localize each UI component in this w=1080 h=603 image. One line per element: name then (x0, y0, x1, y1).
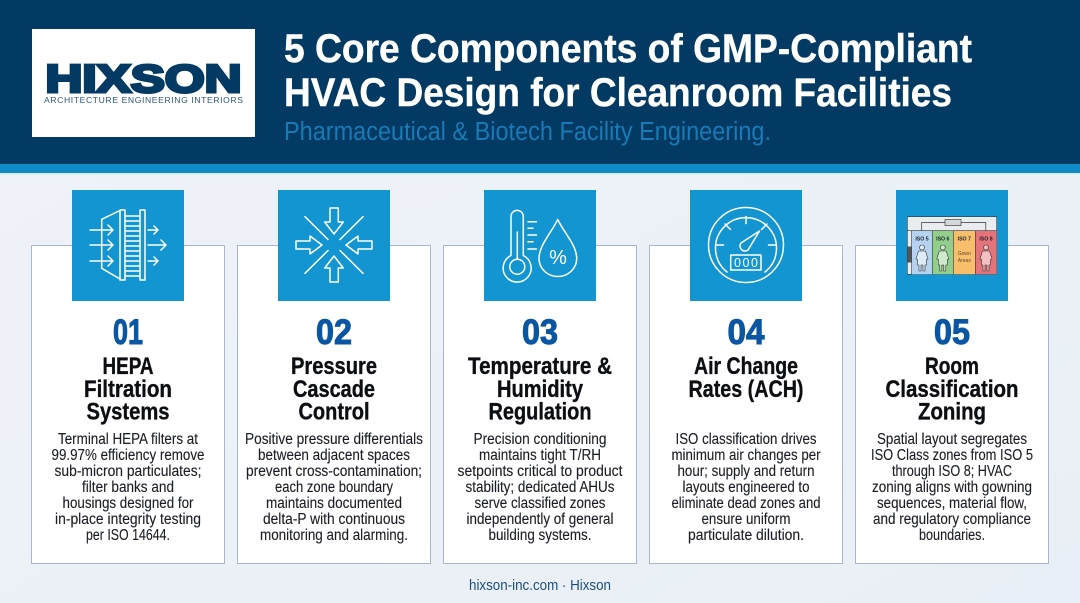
heading: Temperature & Humidity Regulation: Temperature & (468, 353, 612, 380)
heading: Pressure Cascade Control: Control (298, 398, 370, 426)
icon: HEPA filter (90, 210, 166, 280)
number 01: 01 (113, 313, 143, 352)
text: air change description: ISO classification drives (676, 431, 817, 448)
text: pressure description: between adjacent spaces (258, 447, 410, 464)
number 03: 03 (522, 313, 558, 352)
text: air change description (672, 431, 820, 544)
icon: ISO zoning floor plan: ISO 6 (936, 236, 950, 242)
text: HEPA description: sub-micron particulates; (54, 463, 202, 480)
text: HEPA description: 99.97% efficiency remove (52, 447, 204, 464)
text: pressure description: delta-P with continuous (263, 511, 405, 528)
text: zoning description: boundaries. (919, 527, 985, 544)
heading: Room Classification Zoning: Zoning (918, 398, 986, 426)
panel: pressure cascade control (238, 190, 430, 564)
number 04: 04 (728, 313, 765, 352)
heading: Air Change Rates (688, 353, 804, 403)
text: pressure description: each zone boundary (275, 479, 393, 496)
icon: pressure arrows (296, 208, 372, 282)
heading: Air Change Rates: Air Change (694, 353, 798, 380)
text: zoning description: Spatial layout segregates (877, 431, 1027, 448)
heading: Temperature & Humidity Regulation: Humidity (497, 376, 584, 403)
number 02: 02 (316, 313, 352, 352)
text: HEPA description (52, 431, 204, 544)
text: zoning description: through ISO 8; HVAC (892, 463, 1012, 480)
number 05: 05 (934, 313, 970, 352)
text: air change description: ensure uniform (702, 511, 790, 528)
text: zoning description: sequences, material flow, (877, 495, 1027, 512)
header banner (0, 0, 1080, 174)
icon: ISO zoning floor plan: Areas (958, 258, 971, 264)
heading: Room Classification Zoning: Classification (886, 376, 1018, 403)
subtitle: Pharmaceutical & Biotech Facility Engineering. (284, 118, 771, 146)
heading: HEPA Filtration Systems: HEPA (102, 353, 154, 380)
text: pressure description: maintains documented (266, 495, 402, 512)
heading: HEPA Filtration Systems: Filtration (84, 376, 172, 403)
text: air change description: particulate dilution. (688, 527, 804, 544)
text: pressure description: prevent cross-contamination; (246, 463, 422, 480)
text: temperature description: maintains tight T/RH (479, 447, 601, 464)
heading: HEPA Filtration Systems (84, 353, 172, 426)
text: HEPA description: Terminal HEPA filters at (58, 431, 199, 448)
text: HEPA description: per ISO 14644. (86, 527, 170, 544)
panel: temperature and humidity regulation (444, 190, 636, 564)
heading: Temperature & Humidity Regulation (468, 353, 612, 426)
text: temperature description: stability; dedicated AHUs (466, 479, 615, 496)
text: temperature description (458, 431, 623, 544)
text: HEPA description: housings designed for (62, 495, 194, 512)
footer: hixson-inc.com · Hixson (469, 577, 611, 594)
icon: gauge: 000 (734, 256, 758, 270)
text: zoning description: and regulatory compliance (873, 511, 1031, 528)
heading: Temperature & Humidity Regulation: Regulation (488, 398, 592, 426)
text: air change description: hour; supply and return (678, 463, 814, 480)
logo: Hixson: HIXSON (46, 58, 242, 101)
title (284, 27, 972, 115)
text: zoning description: ISO Class zones from ISO 5 (871, 447, 1033, 464)
heading: Pressure Cascade Control: Pressure (291, 353, 377, 380)
heading: Room Classification Zoning: Room (925, 353, 979, 380)
text: zoning description (871, 431, 1033, 544)
icon: ISO zoning floor plan: Gown (958, 251, 971, 257)
icon: thermometer and humidity drop (503, 210, 577, 282)
icon: ISO zoning floor plan: ISO 8 (979, 236, 993, 242)
heading: HEPA Filtration Systems: Systems (86, 398, 170, 426)
text: air change description: layouts engineered to (682, 479, 810, 496)
text: air change description: eliminate dead zones and (672, 495, 820, 512)
text: temperature description: setpoints critical to product (458, 463, 623, 480)
text: HEPA description: in-place integrity testing (55, 511, 201, 528)
icon: ISO zoning floor plan: ISO 7 (958, 236, 971, 242)
text: temperature description: Precision conditioning (474, 431, 606, 448)
panel: room classification zoning (856, 190, 1048, 564)
logo: Hixson: ARCHITECTURE ENGINEERING INTERIORS (44, 95, 243, 105)
text: temperature description: independently of general (466, 511, 614, 528)
text: pressure description (245, 431, 423, 544)
heading: Pressure Cascade Control: Cascade (293, 376, 375, 403)
text: air change description: minimum air changes per (672, 447, 820, 464)
heading: Room Classification Zoning (886, 353, 1018, 426)
icon: thermometer and humidity drop: % (549, 247, 567, 269)
heading: Air Change Rates: Rates (ACH) (688, 376, 804, 403)
text: pressure description: monitoring and alarming. (260, 527, 408, 544)
title: HVAC Design for Cleanroom Facilities (284, 71, 952, 115)
icon: gauge (708, 208, 784, 282)
icon: ISO zoning floor plan (907, 217, 997, 274)
text: temperature description: serve classified zones (474, 495, 606, 512)
icon: ISO zoning floor plan: ISO 5 (915, 236, 929, 242)
panel: HEPA filtration systems (32, 190, 224, 564)
title: 5 Core Components of GMP-Compliant (284, 27, 972, 71)
text: temperature description: building systems. (488, 527, 592, 544)
logo: Hixson (32, 29, 255, 137)
heading: Pressure Cascade Control (291, 353, 377, 426)
text: zoning description: zoning aligns with gowning (872, 479, 1032, 496)
text: pressure description: Positive pressure differentials (245, 431, 423, 448)
text: HEPA description: filter banks and (82, 479, 174, 496)
panel: air change rates (650, 190, 842, 564)
